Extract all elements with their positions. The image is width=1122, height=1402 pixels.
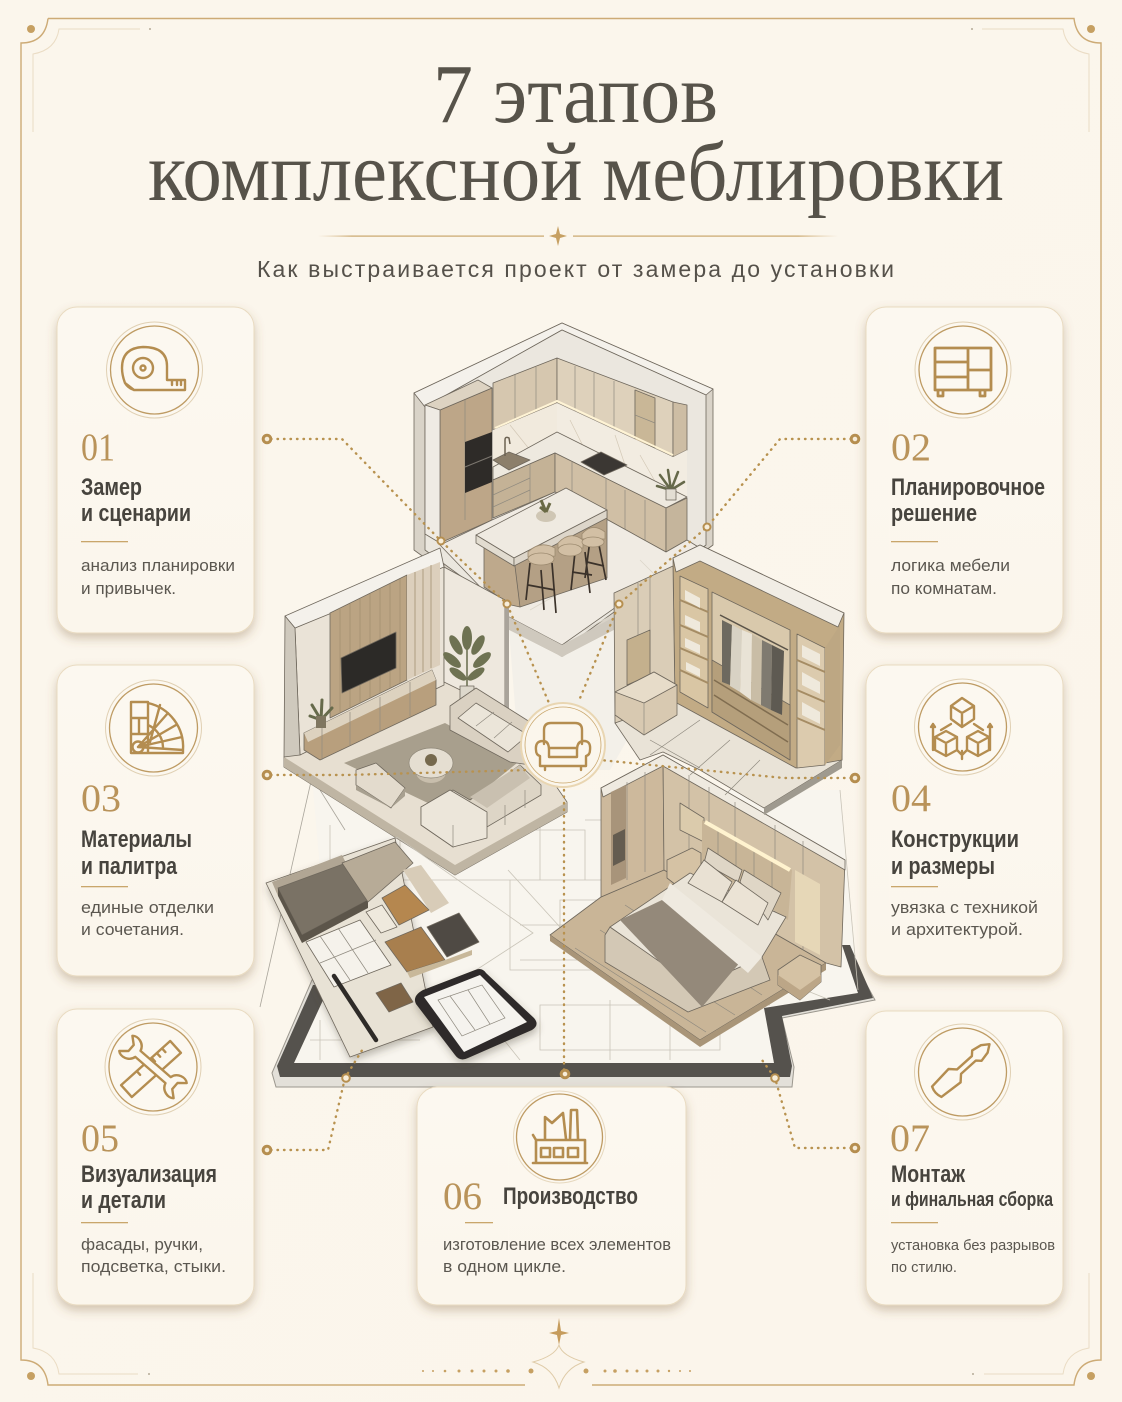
description: по стилю.	[891, 1259, 957, 1276]
heading: Замер	[81, 474, 142, 501]
ottoman	[356, 763, 405, 808]
title: 7 этапов	[433, 48, 718, 141]
rug	[344, 723, 517, 815]
description: единые отделки	[81, 899, 214, 917]
bottom ornament	[422, 1318, 691, 1388]
heading: и сценарии	[81, 500, 191, 527]
heading	[81, 474, 191, 527]
heading: и детали	[81, 1187, 166, 1214]
heading: Монтаж	[891, 1161, 966, 1188]
connector lines	[263, 435, 859, 1154]
materials board	[266, 837, 533, 1057]
step number: 01	[81, 426, 115, 469]
description: увязка с техникой	[891, 899, 1038, 917]
heading: Конструкции	[891, 826, 1019, 853]
step number: 05	[81, 1117, 119, 1160]
heading	[891, 474, 1045, 527]
bedroom shelf niche	[611, 785, 626, 885]
icon: cabinet	[915, 322, 1011, 418]
icon: screwdriver	[914, 1024, 1010, 1120]
kitchen plant	[657, 470, 684, 500]
heading	[81, 826, 192, 880]
description: установка без разрывов	[891, 1237, 1055, 1254]
icon: factory	[514, 1091, 606, 1183]
title	[148, 48, 1004, 219]
card 06: production	[417, 1087, 686, 1305]
description	[891, 899, 1038, 939]
heading	[891, 1161, 1054, 1211]
living room	[284, 548, 567, 875]
description	[891, 1237, 1055, 1276]
title divider with star	[318, 226, 838, 246]
step number: 03	[81, 777, 121, 820]
card 07: installation	[866, 1011, 1063, 1305]
description	[891, 557, 1010, 598]
heading: Производство	[503, 1183, 638, 1210]
description: изготовление всех элементов	[443, 1236, 671, 1254]
description: и привычек.	[81, 580, 176, 598]
subtitle: Как выстраивается проект от замера до установки	[257, 256, 894, 282]
description: в одном цикле.	[443, 1258, 566, 1276]
description: подсветка, стыки.	[81, 1258, 226, 1276]
kitchen room	[414, 323, 713, 657]
coffee table	[409, 748, 453, 783]
bed	[605, 927, 770, 1012]
icon: palette fan	[106, 680, 202, 776]
step number: 06	[443, 1175, 482, 1218]
card 02: layout	[866, 307, 1063, 633]
island	[476, 488, 607, 607]
icon: wrench and ruler	[105, 1019, 201, 1115]
heading: решение	[891, 500, 977, 527]
step number: 02	[891, 426, 931, 469]
description: логика мебели	[891, 557, 1010, 575]
step number: 07	[890, 1117, 930, 1160]
sofas	[421, 688, 541, 847]
description	[443, 1236, 671, 1276]
step number: 04	[891, 777, 931, 820]
bar stools	[526, 527, 606, 613]
central armchair medallion	[521, 703, 605, 787]
kitchen floor	[440, 492, 700, 645]
description: и сочетания.	[81, 921, 184, 939]
card 01: measure	[57, 307, 254, 633]
heading: Планировочное	[891, 474, 1045, 501]
heading	[891, 826, 1019, 880]
description: и архитектурой.	[891, 921, 1023, 939]
heading: и финальная сборка	[891, 1189, 1054, 1211]
central isometric illustration	[260, 323, 875, 1154]
heading	[81, 1161, 217, 1214]
bedroom	[550, 755, 845, 1047]
blueprint paper and tray	[260, 755, 875, 1087]
icon: cubes	[914, 679, 1010, 775]
heading: и палитра	[81, 853, 178, 880]
icon: tape measure	[106, 322, 202, 418]
card 04: constructions	[866, 665, 1063, 976]
heading: и размеры	[891, 853, 995, 880]
title: комплексной меблировки	[148, 126, 1004, 219]
central marble floor	[509, 630, 650, 770]
plants	[310, 626, 493, 728]
description	[81, 899, 214, 939]
description: фасады, ручки,	[81, 1236, 203, 1254]
description	[81, 557, 235, 598]
card 03: materials	[57, 665, 254, 976]
wardrobe room	[614, 545, 844, 815]
heading: Визуализация	[81, 1161, 217, 1188]
pen	[334, 976, 376, 1040]
card 05: visualization	[57, 1009, 254, 1305]
description	[81, 1236, 226, 1276]
description: анализ планировки	[81, 557, 235, 575]
description: по комнатам.	[891, 580, 997, 598]
tablet	[415, 969, 537, 1059]
heading: Материалы	[81, 826, 192, 853]
